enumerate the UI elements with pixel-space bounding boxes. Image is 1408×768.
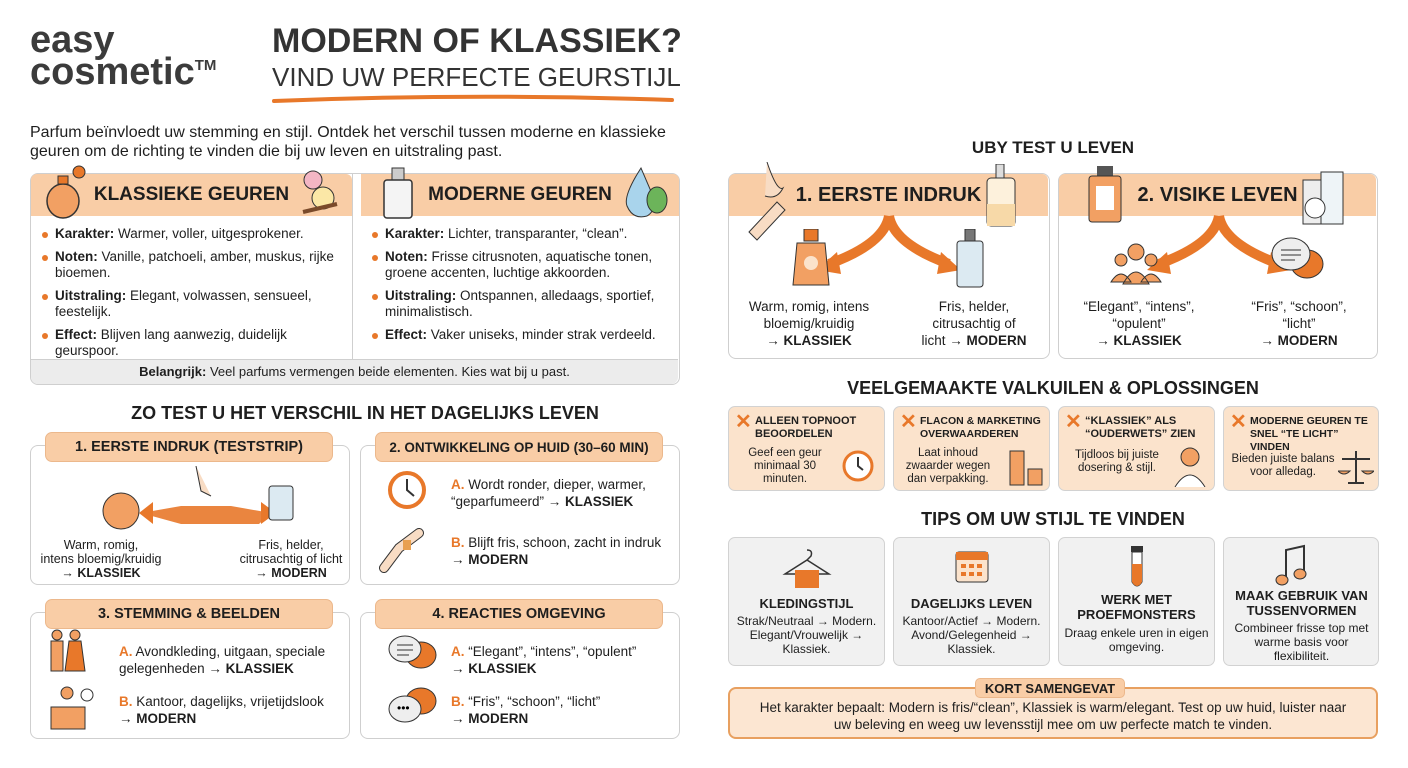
text A: [41, 538, 161, 580]
card: topnoot: ✕: [735, 411, 752, 433]
text klassiek: [749, 299, 869, 348]
text B: → MODERN: [255, 566, 327, 580]
icon: speech bubbles B: [388, 688, 436, 722]
card: proefmonsters: [1058, 537, 1215, 666]
text A: → KLASSIEK: [61, 566, 141, 580]
summary tab: [975, 678, 1125, 698]
text B: [451, 535, 662, 567]
summary box: [728, 687, 1378, 739]
text klassiek: “Elegant”, “intens”, “opulent”: [1083, 299, 1195, 331]
card: ouderwets: ✕: [1065, 411, 1082, 433]
icon: bottle scale: [1010, 450, 1042, 486]
icon: speech bubbles B: •••: [397, 701, 410, 715]
note belangrijk: Belangrijk: Veel parfums vermengen beide elementen. Kies wat bij u past.: [139, 364, 570, 379]
panel: 4 reacties: [360, 612, 680, 739]
card: proefmonsters: WERK MET PROEFMONSTERS: [1077, 592, 1196, 622]
icon: water drop leaf: [626, 167, 668, 218]
list klassieke: Uitstraling: Elegant, volwassen, sensueel, feestelijk.: [55, 288, 312, 319]
text modern: [1251, 299, 1347, 348]
text B: B. Blijft fris, schoon, zacht in indruk: [451, 535, 661, 550]
logo: [30, 19, 216, 93]
heading moderne: MODERNE GEUREN: [428, 184, 612, 205]
panel: 3 stemming: [30, 612, 350, 739]
logo: easy: [30, 19, 115, 61]
icon: nose and strip: [748, 162, 786, 241]
heading: uby test u leven: UBY TEST U LEVEN: [972, 138, 1134, 157]
card: tussenvormen: [1223, 537, 1379, 666]
heading: [729, 174, 1048, 216]
panel: 1 eerste indruk right: [728, 173, 1050, 359]
text modern: citrusachtig of: [932, 316, 1016, 331]
icon: modern bottle: [383, 168, 413, 219]
icon: square bottle: [1088, 166, 1122, 222]
icon: perfume nose arrows: [102, 466, 294, 530]
tab 1: [45, 432, 333, 462]
arrows: [827, 215, 956, 274]
icon: woman: [1173, 445, 1207, 487]
text A: intens bloemig/kruidig: [41, 552, 161, 566]
card: tussenvormen: MAAK GEBRUIK VAN TUSSENVORMEN: [1235, 588, 1368, 618]
heading: zo test u: ZO TEST U HET VERSCHIL IN HET DAGELIJKS LEVEN: [131, 403, 599, 423]
list klassieke: Effect: Blijven lang aanwezig, duidelijk geurspoor.: [55, 326, 287, 358]
list moderne: Uitstraling: Ontspannen, alledaags, sportief, minimalistisch.: [385, 288, 654, 319]
text modern: “Fris”, “schoon”, “licht”: [1251, 299, 1347, 331]
summary tab: KORT SAMENGEVAT: [985, 680, 1115, 696]
tab 3: [45, 599, 333, 629]
heading: 2. VISIKE LEVEN: [1137, 184, 1298, 206]
heading klassieke: KLASSIEKE GEUREN: [94, 184, 289, 205]
list klassieke: Karakter: Warmer, voller, uitgesprokener.: [55, 226, 304, 241]
title: MODERN OF KLASSIEK?: [272, 22, 682, 60]
icon: test tube: [1127, 544, 1147, 590]
icon: calendar: [954, 548, 990, 584]
icon: modern bottle: [956, 229, 984, 288]
icon: speech bubbles A: [388, 636, 436, 668]
text klassiek: → KLASSIEK: [1096, 333, 1182, 348]
tab 4: [375, 599, 663, 629]
text modern: [921, 299, 1026, 348]
text A: A. Avondkleding, uitgaan, speciale gelegenheden → KLASSIEK: [119, 644, 325, 676]
card: proefmonsters: Draag enkele uren in eigen omgeving.: [1064, 626, 1209, 654]
list klassieke: Noten: Vanille, patchoeli, amber, muskus, rijke bioemen.: [55, 248, 334, 280]
icon: flowers: [302, 170, 338, 214]
heading: 1. EERSTE INDRUK: [796, 184, 981, 206]
card: ouderwets: [1058, 406, 1215, 491]
text klassiek: Warm, romig, intens bloemig/kruidig: [749, 299, 869, 331]
tab 2: [375, 432, 663, 462]
text B: [240, 538, 342, 580]
card: flacon: FLACON & MARKETING OVERWAARDEREN: [920, 415, 1041, 440]
text klassiek: [1083, 299, 1195, 348]
icon: classic bottle: [46, 166, 86, 219]
heading: tips: TIPS OM UW STIJL TE VINDEN: [921, 509, 1185, 529]
text modern: Fris, helder,: [939, 299, 1009, 314]
note belangrijk: [31, 359, 678, 384]
icon: bottles clock: [1302, 172, 1344, 224]
title: VIND UW PERFECTE GEURSTIJL: [272, 62, 681, 92]
card: kledingstijl: KLEDINGSTIJL: [760, 596, 853, 611]
card: kledingstijl: [728, 537, 885, 666]
icon: couple: [50, 630, 86, 672]
card: ouderwets: Tijdloos bij juiste dosering & stijl.: [1075, 449, 1159, 474]
heading moderne: [361, 174, 679, 216]
heading: [1059, 174, 1376, 216]
card: dagelijks: [893, 537, 1050, 666]
text B: → MODERN: [451, 552, 528, 567]
summary box: Het karakter bepaalt: Modern is fris/“clean”, Klassiek is warm/elegant. Test op uw huid, luister naar uw beleving en weeg uw levensstijl mee om uw perfecte match te vinden.: [760, 700, 1346, 732]
text A: [451, 644, 636, 676]
text B: B. “Fris”, “schoon”, “licht”: [451, 694, 600, 709]
card: tussenvormen: Combineer frisse top met warme basis voor flexibiliteit.: [1234, 621, 1369, 663]
text A: → KLASSIEK: [451, 661, 537, 676]
panel: 2 ontwikkeling: [360, 445, 680, 585]
text modern: licht → MODERN: [921, 333, 1026, 348]
text modern: → MODERN: [1260, 333, 1338, 348]
tab 4: 4. REACTIES OMGEVING: [432, 606, 606, 622]
card: te licht: ✕: [1230, 411, 1247, 433]
text B: → MODERN: [451, 711, 528, 726]
card: flacon: [893, 406, 1050, 491]
icon: music notes: [1274, 544, 1314, 588]
arrows: [1147, 215, 1290, 274]
icon: classic bottle: [792, 229, 830, 286]
tab 3: 3. STEMMING & BEELDEN: [98, 606, 280, 622]
icon: people: [1110, 244, 1162, 284]
text B: [451, 694, 600, 726]
icon: chat: [1272, 238, 1324, 278]
text klassiek: → KLASSIEK: [766, 333, 852, 348]
card: ouderwets: “KLASSIEK” ALS “OUDERWETS” ZIEN: [1085, 415, 1195, 440]
text A: A. “Elegant”, “intens”, “opulent”: [451, 644, 636, 659]
tab 1: 1. EERSTE INDRUK (TESTSTRIP): [75, 439, 303, 455]
tab 2: 2. ONTWIKKELING OP HUID (30–60 MIN): [389, 440, 649, 454]
card: dagelijks: DAGELIJKS LEVEN: [911, 596, 1032, 611]
heading: valkuilen: VEELGEMAAKTE VALKUILEN & OPLOSSINGEN: [847, 378, 1259, 398]
icon: spray bottle: [986, 164, 1016, 226]
text B: Fris, helder,: [258, 538, 324, 552]
card: flacon: Laat inhoud zwaarder wegen dan verpakking.: [906, 447, 990, 485]
text B: [119, 694, 324, 726]
card: flacon: ✕: [900, 411, 917, 433]
heading klassieke: [31, 174, 352, 216]
panel: 2 visike leven: [1058, 173, 1378, 359]
logo: cosmeticTM: [30, 51, 216, 93]
card: te licht: MODERNE GEUREN TE SNEL “TE LICHT” VINDEN: [1250, 415, 1368, 453]
card: dagelijks: Kantoor/Actief → Modern. Avond/Gelegenheid → Klassiek.: [902, 614, 1041, 656]
panel: 1 eerste indruk teststrip: [30, 445, 350, 585]
card: te licht: [1223, 406, 1379, 491]
card: topnoot: [728, 406, 885, 491]
text A: A. Wordt ronder, dieper, warmer, “geparfumeerd” → KLASSIEK: [451, 477, 646, 509]
title: [272, 22, 682, 103]
icon: hanger: [781, 546, 833, 590]
list moderne: Karakter: Lichter, transparanter, “clean”.: [385, 226, 627, 241]
card: te licht: Bieden juiste balans voor alledag.: [1232, 453, 1334, 478]
text B: B. Kantoor, dagelijks, vrijetijdslook: [119, 694, 324, 709]
panel: moderne geuren: [361, 167, 679, 342]
card: kledingstijl: Strak/Neutraal → Modern. Elegant/Vrouwelijk → Klassiek.: [737, 614, 876, 656]
intro text: Parfum beïnvloedt uw stemming en stijl. Ontdek het verschil tussen moderne en klassieke geuren om de richting te vinden die bij uw leven en uitstraling past.: [30, 124, 666, 160]
icon: clock: [388, 471, 426, 509]
card: topnoot: Geef een geur minimaal 30 minuten.: [748, 447, 822, 485]
list moderne: [372, 226, 656, 342]
card: topnoot: ALLEEN TOPNOOT BEOORDELEN: [755, 415, 856, 440]
icon: scale: [1338, 449, 1374, 487]
text A: Warm, romig,: [64, 538, 138, 552]
icon: wrist: [379, 528, 424, 573]
panel: klassieke / moderne geuren: [30, 173, 680, 385]
list moderne: Noten: Frisse citrusnoten, aquatische tonen, groene accenten, luchtige akkoorden.: [385, 248, 652, 280]
list klassieke: [42, 226, 334, 358]
list moderne: Effect: Vaker uniseks, minder strak verdeeld.: [385, 326, 656, 342]
icon: clock: [842, 450, 874, 482]
text B: → MODERN: [119, 711, 196, 726]
text B: citrusachtig of licht: [240, 552, 342, 566]
icon: office: [50, 686, 94, 730]
panel: klassieke geuren: [31, 174, 353, 359]
